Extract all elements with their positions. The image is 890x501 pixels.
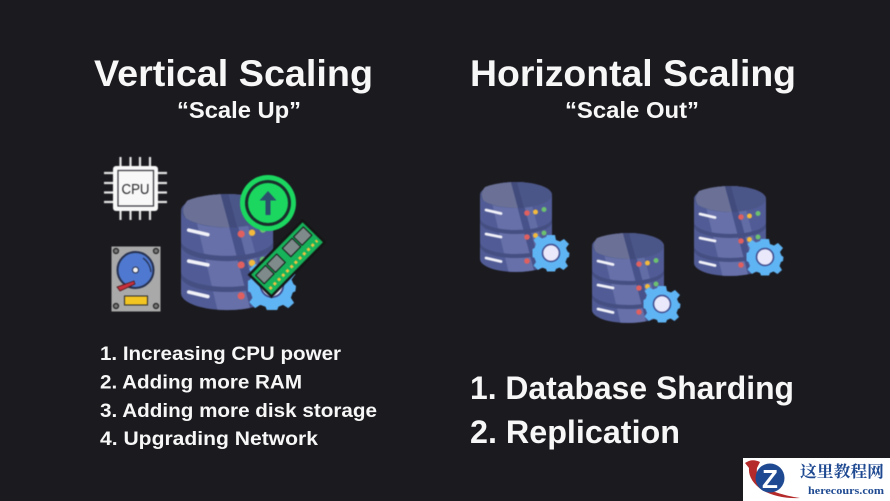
subheading: Scale Up: “Scale Up” [177,97,301,123]
watermark logo: 这里教程网 [800,459,884,482]
list: vertical scaling methods: 4. Upgrading Network [100,428,318,450]
list: horizontal scaling methods: 2. Replication [470,414,680,450]
heading: Vertical Scaling: Vertical Scaling [94,53,373,94]
list: vertical scaling methods: 3. Adding more disk storage [100,400,377,422]
watermark logo [743,458,890,501]
subheading: Scale Out: “Scale Out” [565,97,699,123]
icon: CPU chip [104,157,167,220]
icon: database node 1 [480,182,570,274]
icon: large database with gear [181,194,296,313]
icon: green upgrade arrow [240,175,296,231]
list: vertical scaling methods [100,343,377,450]
list: vertical scaling methods: 1. Increasing CPU power [100,343,341,365]
list: horizontal scaling methods [470,370,794,450]
watermark logo: herecours.com [808,485,884,497]
icon: hard disk [112,246,160,312]
watermark logo: Z [762,464,778,494]
icon: RAM stick [249,221,325,296]
list: vertical scaling methods: 2. Adding more RAM [100,372,302,394]
icon: CPU chip: CPU [122,182,150,198]
heading: Horizontal Scaling: Horizontal Scaling [470,53,796,94]
icon: database node 2 [592,233,680,325]
list: horizontal scaling methods: 1. Database Sharding [470,370,794,406]
icon: database node 3 [694,186,784,278]
